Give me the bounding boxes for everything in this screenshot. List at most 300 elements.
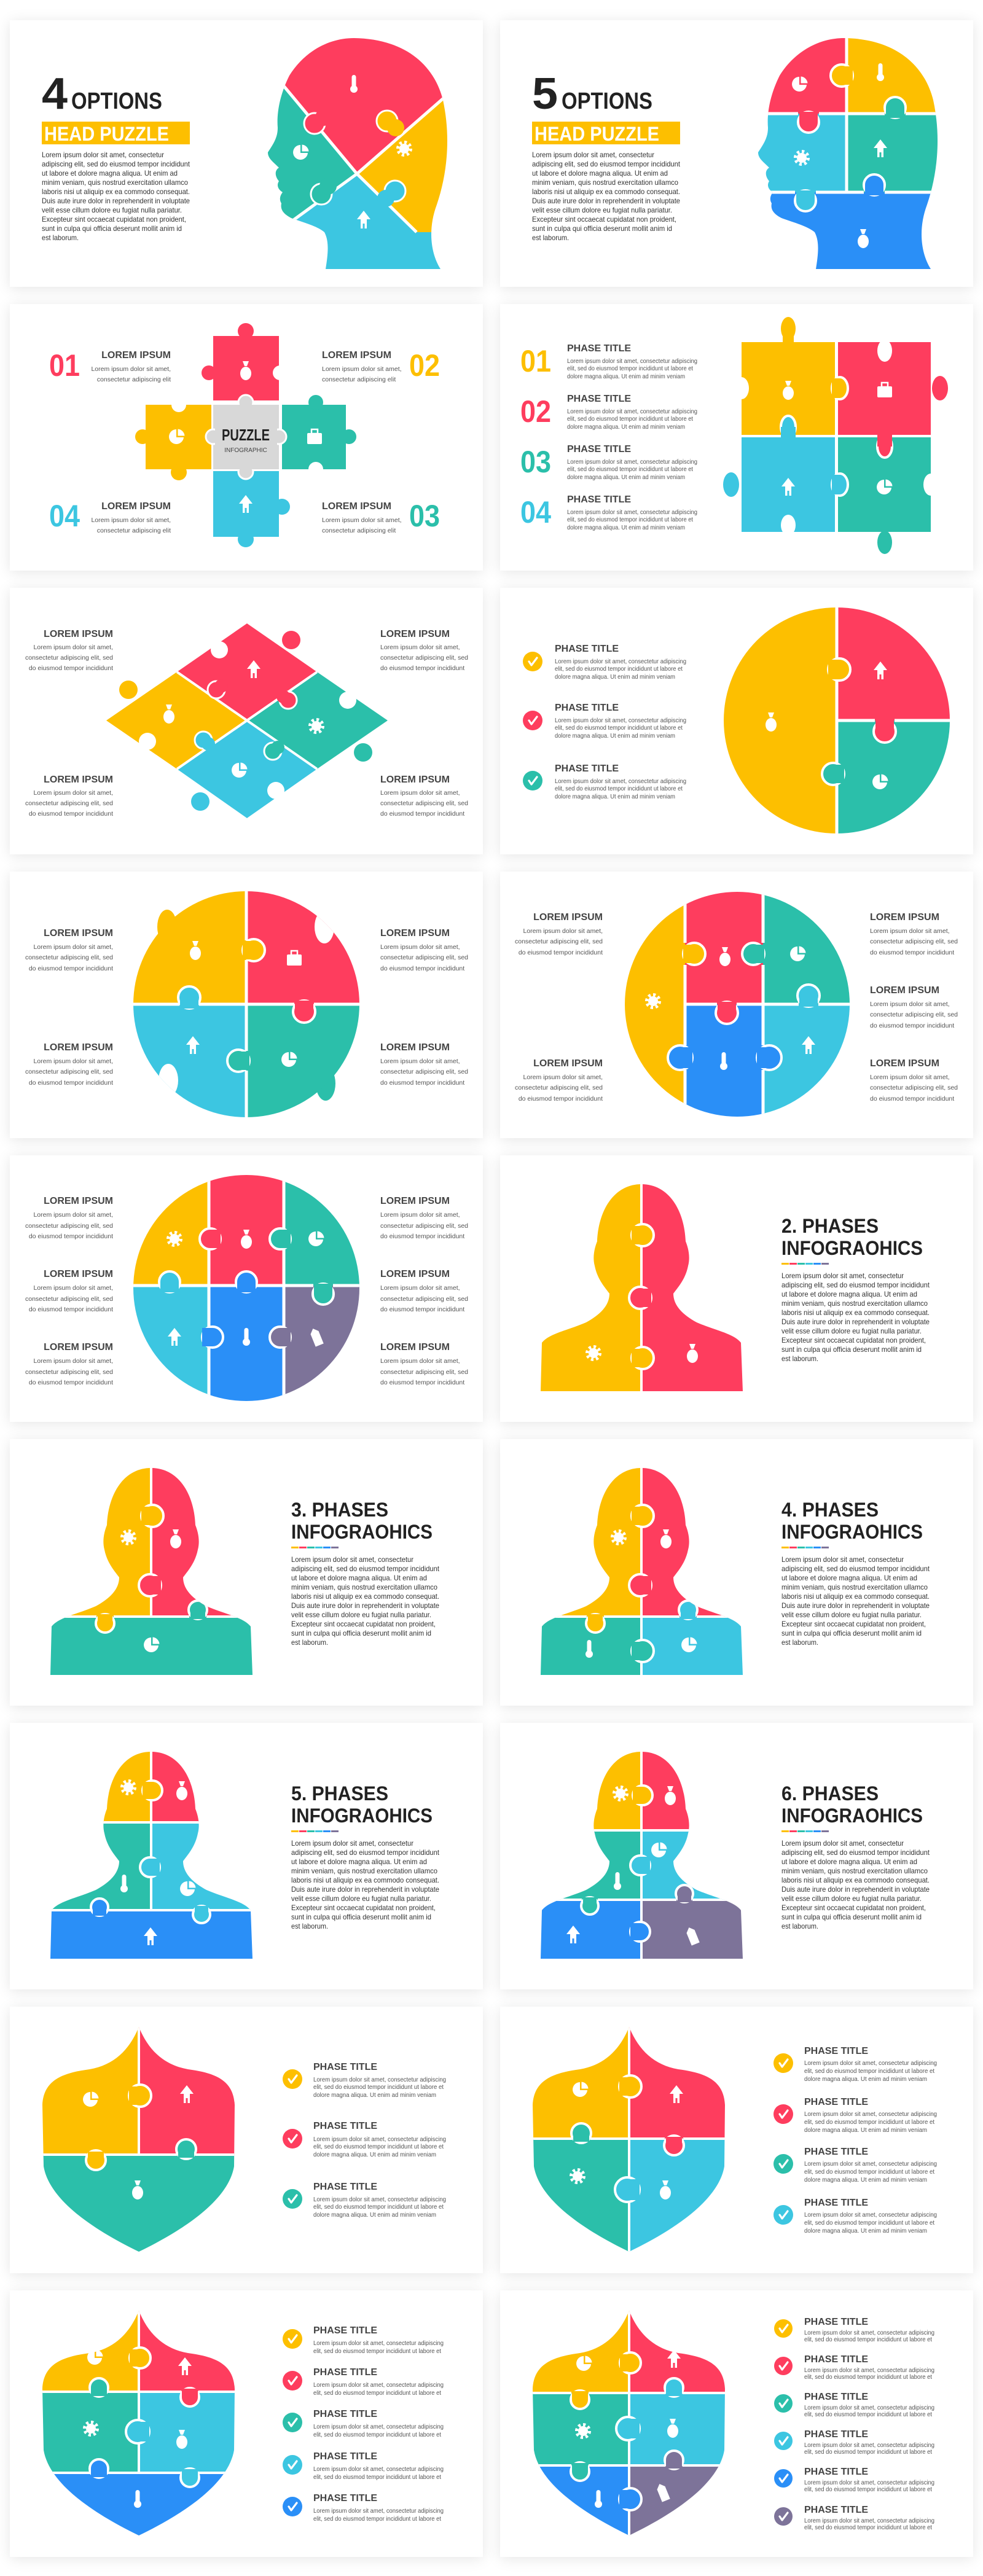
text: bottom left: do eiusmod tempor incididunt [29, 810, 113, 818]
phase list: PHASE TITLE [804, 2354, 868, 2365]
color bar [291, 1830, 339, 1832]
paragraph: velit esse cillum dolore eu fugiat nulla pariatur. [781, 1894, 922, 1903]
phase list [773, 2046, 937, 2234]
phase list: Lorem ipsum dolor sit amet, consectetur adipiscing [804, 2329, 934, 2336]
phase list [523, 644, 686, 800]
phase list: PHASE TITLE [804, 2429, 868, 2440]
phase list: 04 [520, 495, 551, 529]
phase list: PHASE TITLE [804, 2198, 868, 2208]
center label: puzzle infographic [222, 426, 270, 454]
card 13: 5 phases person [10, 1723, 483, 1989]
paragraph: minim veniam, quis nostrud exercitation ullamco [291, 1583, 437, 1591]
card 1: 4 options head puzzle [10, 20, 483, 287]
text left bottom: LOREM IPSUM [44, 1042, 113, 1053]
text right 1 [870, 912, 958, 956]
text left top: consectetur adipiscing elit, sed [25, 954, 113, 961]
phase list: PHASE TITLE [555, 703, 619, 713]
card 7: circle 4 pieces [10, 872, 483, 1138]
text right bottom: consectetur adipiscing elit, sed [380, 1068, 468, 1075]
paragraph: adipiscing elit, sed do eiusmod tempor incididunt [781, 1848, 930, 1857]
text left bottom: Lorem ipsum dolor sit amet, [33, 1058, 113, 1065]
title: 3. phases infograohics: INFOGRAOHICS [291, 1521, 433, 1543]
phase list: Lorem ipsum dolor sit amet, consectetur adipiscing [555, 778, 686, 785]
paragraph: sunt in culpa qui officia deserunt mollit anim id [291, 1913, 431, 1921]
paragraph: sunt in culpa qui officia deserunt mollit anim id [781, 1629, 922, 1637]
paragraph: Duis aute irure dolor in reprehenderit in voluptate [781, 1885, 930, 1894]
paragraph [291, 1839, 440, 1930]
paragraph: ut labore et dolore magna aliqua. Ut enim ad [291, 1857, 427, 1866]
phase list: elit, sed do eiusmod tempor incididunt ut labore et [555, 665, 683, 673]
paragraph: Lorem ipsum dolor sit amet, consectetur [532, 150, 654, 159]
item 03: LOREM IPSUM [322, 501, 391, 512]
item 04: Lorem ipsum dolor sit amet, [91, 517, 171, 524]
item 02: LOREM IPSUM [322, 350, 391, 361]
paragraph: est laborum. [781, 1922, 818, 1930]
phase list: PHASE TITLE [804, 2317, 868, 2327]
paragraph: laboris nisi ut aliquip ex ea commodo consequat. [42, 187, 190, 196]
phase list: elit, sed do eiusmod tempor incididunt ut labore et [313, 2389, 441, 2397]
puzzle cross graphic [135, 323, 356, 547]
title: 4. phases infograohics: 4. PHASES [781, 1499, 879, 1521]
paragraph: laboris nisi ut aliquip ex ea commodo consequat. [781, 1876, 930, 1884]
title: 5 options: 5 [532, 69, 558, 119]
paragraph: Excepteur sint occaecat cupidatat non proident, [42, 215, 186, 224]
phase list: dolore magna aliqua. Ut enim ad minim veniam [555, 793, 675, 800]
paragraph: est laborum. [532, 233, 569, 242]
circle puzzle graphic [133, 1175, 359, 1401]
item 04: consectetur adipiscing elit [97, 527, 171, 534]
item 04: LOREM IPSUM [101, 501, 171, 512]
phase list: PHASE TITLE [313, 2062, 377, 2072]
phase list: Lorem ipsum dolor sit amet, consectetur adipiscing [313, 2507, 444, 2515]
paragraph: Lorem ipsum dolor sit amet, consectetur [42, 150, 164, 159]
paragraph: sunt in culpa qui officia deserunt mollit anim id [532, 224, 672, 233]
phase list: dolore magna aliqua. Ut enim ad minim veniam [567, 373, 685, 380]
text left 1 [25, 1196, 113, 1240]
paragraph: laboris nisi ut aliquip ex ea commodo consequat. [291, 1592, 439, 1601]
phase list: dolore magna aliqua. Ut enim ad minim veniam [804, 2176, 927, 2184]
title: 3. phases infograohics [291, 1499, 433, 1543]
phase list: PHASE TITLE [804, 2097, 868, 2107]
banner: head puzzle: HEAD PUZZLE [535, 123, 659, 145]
phase list: elit, sed do eiusmod tempor incididunt ut labore et [804, 2411, 932, 2418]
text left top [25, 928, 113, 972]
phase list: PHASE TITLE [313, 2121, 377, 2131]
phase list: PHASE TITLE [804, 2392, 868, 2402]
item 02: consectetur adipiscing elit [322, 376, 396, 383]
title: 5 options [532, 69, 652, 119]
item 04: 04 [49, 499, 80, 533]
paragraph: adipiscing elit, sed do eiusmod tempor incididunt [781, 1564, 930, 1573]
paragraph: minim veniam, quis nostrud exercitation ullamco [781, 1867, 928, 1875]
text right 1: LOREM IPSUM [870, 912, 939, 923]
phase list: elit, sed do eiusmod tempor incididunt ut labore et [555, 724, 683, 732]
circle puzzle graphic [133, 891, 359, 1117]
text left 3: Lorem ipsum dolor sit amet, [33, 1357, 113, 1365]
phase list: dolore magna aliqua. Ut enim ad minim veniam [555, 732, 675, 740]
paragraph: ut labore et dolore magna aliqua. Ut enim ad [532, 169, 668, 178]
paragraph: velit esse cillum dolore eu fugiat nulla pariatur. [42, 206, 182, 214]
text left 3: LOREM IPSUM [44, 1342, 113, 1352]
phase list: Lorem ipsum dolor sit amet, consectetur adipiscing [313, 2340, 444, 2347]
paragraph: velit esse cillum dolore eu fugiat nulla pariatur. [781, 1327, 922, 1335]
text right 3 [870, 1058, 958, 1103]
text right 3: consectetur adipiscing elit, sed [870, 1084, 958, 1091]
phase list: PHASE TITLE [567, 394, 631, 404]
text: bottom right [380, 775, 468, 818]
paragraph: adipiscing elit, sed do eiusmod tempor incididunt [291, 1564, 440, 1573]
text left 1: do eiusmod tempor incididunt [29, 1233, 113, 1240]
text left 2: LOREM IPSUM [44, 1269, 113, 1279]
paragraph: velit esse cillum dolore eu fugiat nulla pariatur. [291, 1894, 431, 1903]
text: bottom right: LOREM IPSUM [380, 775, 450, 785]
paragraph: Excepteur sint occaecat cupidatat non proident, [532, 215, 676, 224]
title: 2. phases infograohics [781, 1215, 923, 1259]
phase list: Lorem ipsum dolor sit amet, consectetur adipiscing [804, 2404, 934, 2411]
phase list: elit, sed do eiusmod tempor incididunt ut labore et [804, 2486, 932, 2493]
shield puzzle graphic [525, 2303, 734, 2545]
title: 5. phases infograohics [291, 1782, 433, 1827]
text right 2: do eiusmod tempor incididunt [870, 1022, 954, 1029]
text left bottom [515, 1058, 603, 1103]
card 6: half circle puzzle with checklist [500, 588, 973, 854]
text: top left: LOREM IPSUM [44, 629, 113, 639]
text: bottom left: LOREM IPSUM [44, 775, 113, 785]
person puzzle graphic [537, 1464, 746, 1679]
phase list: elit, sed do eiusmod tempor incididunt ut labore et [313, 2431, 441, 2438]
item 03: 03 [409, 499, 440, 533]
text: bottom right: do eiusmod tempor incididunt [380, 810, 464, 818]
phase list: elit, sed do eiusmod tempor incididunt ut labore et [804, 2448, 932, 2456]
paragraph: laboris nisi ut aliquip ex ea commodo consequat. [532, 187, 680, 196]
text right top: Lorem ipsum dolor sit amet, [380, 943, 460, 951]
text: top left: Lorem ipsum dolor sit amet, [33, 644, 113, 651]
phase list [283, 2062, 446, 2219]
phase list: Lorem ipsum dolor sit amet, consectetur adipiscing [555, 717, 686, 724]
paragraph: Excepteur sint occaecat cupidatat non proident, [291, 1903, 436, 1912]
paragraph [781, 1271, 930, 1363]
text left top: LOREM IPSUM [533, 912, 603, 923]
phase list [283, 2325, 444, 2523]
shield puzzle graphic [34, 2303, 243, 2547]
item 01: 01 [49, 348, 80, 383]
item 01: Lorem ipsum dolor sit amet, [91, 365, 171, 373]
phase list: PHASE TITLE [313, 2325, 377, 2336]
phase list: PHASE TITLE [804, 2147, 868, 2157]
circle puzzle graphic [625, 892, 850, 1117]
text right 2: consectetur adipiscing elit, sed [870, 1011, 958, 1018]
text right 3: do eiusmod tempor incididunt [380, 1379, 464, 1386]
text left bottom: Lorem ipsum dolor sit amet, [523, 1074, 603, 1081]
paragraph: Lorem ipsum dolor sit amet, consectetur [781, 1839, 904, 1848]
paragraph: Duis aute irure dolor in reprehenderit in voluptate [532, 197, 680, 205]
text: top right [380, 629, 468, 672]
paragraph: Duis aute irure dolor in reprehenderit in voluptate [781, 1317, 930, 1326]
paragraph [291, 1555, 440, 1647]
text right 3: do eiusmod tempor incididunt [870, 1095, 954, 1103]
text right top [380, 928, 468, 972]
paragraph [42, 150, 190, 242]
phase list: dolore magna aliqua. Ut enim ad minim veniam [313, 2091, 436, 2099]
item 02: Lorem ipsum dolor sit amet, [322, 365, 402, 373]
text right 2: consectetur adipiscing elit, sed [380, 1295, 468, 1303]
paragraph: adipiscing elit, sed do eiusmod tempor incididunt [532, 160, 681, 168]
card 11: 3 phases person [10, 1439, 483, 1706]
text left 2: consectetur adipiscing elit, sed [25, 1295, 113, 1303]
title: 6. phases infograohics: 6. PHASES [781, 1782, 879, 1805]
item 03 [322, 499, 440, 534]
text right 3: Lorem ipsum dolor sit amet, [870, 1074, 950, 1081]
phase list: Lorem ipsum dolor sit amet, consectetur adipiscing [555, 658, 686, 665]
text left 3: do eiusmod tempor incididunt [29, 1379, 113, 1386]
paragraph: ut labore et dolore magna aliqua. Ut enim ad [42, 169, 178, 178]
item 02: 02 [409, 348, 440, 383]
color bar [781, 1547, 829, 1548]
text right 3: Lorem ipsum dolor sit amet, [380, 1357, 460, 1365]
card 15: shield 3 pieces [10, 2007, 483, 2273]
phase list: 03 [520, 445, 551, 479]
card 8: circle 5 pieces [500, 872, 973, 1138]
card 16: shield 4 pieces [500, 2007, 973, 2273]
paragraph: Lorem ipsum dolor sit amet, consectetur [291, 1555, 413, 1564]
circle puzzle graphic [721, 600, 955, 840]
paragraph: Lorem ipsum dolor sit amet, consectetur [781, 1271, 904, 1280]
person puzzle graphic [537, 1180, 746, 1395]
phase list: PHASE TITLE [567, 444, 631, 455]
paragraph: Excepteur sint occaecat cupidatat non proident, [781, 1336, 926, 1345]
paragraph [532, 150, 681, 242]
text right 2: Lorem ipsum dolor sit amet, [870, 1001, 950, 1008]
text right 1: do eiusmod tempor incididunt [380, 1233, 464, 1240]
paragraph: minim veniam, quis nostrud exercitation ullamco [291, 1867, 437, 1875]
phase list [774, 2317, 934, 2531]
person puzzle graphic [47, 1464, 256, 1678]
phase list: Lorem ipsum dolor sit amet, consectetur adipiscing [567, 408, 697, 415]
item 01 [49, 348, 171, 383]
title: 4 options: OPTIONS [71, 88, 162, 114]
2x2 puzzle graphic [723, 317, 948, 554]
paragraph: est laborum. [781, 1354, 818, 1363]
title: 6. phases infograohics [781, 1782, 923, 1827]
paragraph: minim veniam, quis nostrud exercitation ullamco [781, 1299, 928, 1308]
paragraph: est laborum. [291, 1638, 328, 1647]
text left 3 [25, 1342, 113, 1386]
text right bottom: do eiusmod tempor incididunt [380, 1079, 464, 1087]
phase list: elit, sed do eiusmod tempor incididunt ut labore et [804, 2219, 934, 2227]
phase list: Lorem ipsum dolor sit amet, consectetur adipiscing [567, 458, 697, 466]
phase list: Lorem ipsum dolor sit amet, consectetur adipiscing [313, 2423, 444, 2430]
phase list: dolore magna aliqua. Ut enim ad minim veniam [804, 2227, 927, 2234]
phase list: PHASE TITLE [567, 494, 631, 505]
phase list: dolore magna aliqua. Ut enim ad minim veniam [567, 423, 685, 431]
phase list: elit, sed do eiusmod tempor incididunt ut labore et [804, 2524, 932, 2531]
center label: puzzle infographic: INFOGRAPHIC [224, 447, 267, 454]
person puzzle graphic [47, 1747, 256, 1962]
text left 2: Lorem ipsum dolor sit amet, [33, 1284, 113, 1292]
text left top [515, 912, 603, 956]
phase list: dolore magna aliqua. Ut enim ad minim veniam [555, 673, 675, 681]
phase list: elit, sed do eiusmod tempor incididunt ut labore et [313, 2348, 441, 2355]
phase list: Lorem ipsum dolor sit amet, consectetur adipiscing [804, 2160, 937, 2168]
phase list: dolore magna aliqua. Ut enim ad minim veniam [313, 2151, 436, 2158]
paragraph: velit esse cillum dolore eu fugiat nulla pariatur. [532, 206, 672, 214]
paragraph: laboris nisi ut aliquip ex ea commodo consequat. [781, 1308, 930, 1317]
text right bottom [380, 1042, 468, 1087]
phase list: Lorem ipsum dolor sit amet, consectetur adipiscing [804, 2367, 934, 2374]
paragraph: Duis aute irure dolor in reprehenderit in voluptate [42, 197, 190, 205]
phase list: Lorem ipsum dolor sit amet, consectetur adipiscing [313, 2196, 446, 2203]
text right 2: LOREM IPSUM [870, 985, 939, 996]
title: 4. phases infograohics: INFOGRAOHICS [781, 1521, 923, 1543]
text left top: LOREM IPSUM [44, 928, 113, 939]
phase list: elit, sed do eiusmod tempor incididunt ut labore et [567, 466, 693, 473]
text: top right: do eiusmod tempor incididunt [380, 665, 464, 672]
diamond puzzle graphic [106, 623, 388, 818]
title: 4 options: 4 [42, 69, 68, 119]
item 02 [322, 348, 440, 383]
phase list: 01 [520, 344, 551, 378]
phase list: PHASE TITLE [313, 2451, 377, 2462]
phase list: dolore magna aliqua. Ut enim ad minim veniam [804, 2126, 927, 2134]
phase list: elit, sed do eiusmod tempor incididunt ut labore et [567, 415, 693, 423]
paragraph: minim veniam, quis nostrud exercitation ullamco [42, 178, 188, 187]
phase list: Lorem ipsum dolor sit amet, consectetur adipiscing [804, 2059, 937, 2067]
phase list: elit, sed do eiusmod tempor incididunt ut labore et [804, 2168, 934, 2176]
phase list: elit, sed do eiusmod tempor incididunt ut labore et [804, 2067, 934, 2075]
phase list: PHASE TITLE [804, 2467, 868, 2477]
text: bottom left [25, 775, 113, 818]
text right 2: LOREM IPSUM [380, 1269, 450, 1279]
phase list: dolore magna aliqua. Ut enim ad minim veniam [804, 2075, 927, 2083]
card 9: circle 6 pieces [10, 1155, 483, 1422]
paragraph: velit esse cillum dolore eu fugiat nulla pariatur. [781, 1610, 922, 1619]
phase list: PHASE TITLE [313, 2493, 377, 2504]
title: 5. phases infograohics: 5. PHASES [291, 1782, 388, 1805]
text right 2: Lorem ipsum dolor sit amet, [380, 1284, 460, 1292]
paragraph: laboris nisi ut aliquip ex ea commodo consequat. [291, 1876, 439, 1884]
paragraph: adipiscing elit, sed do eiusmod tempor incididunt [42, 160, 190, 168]
text right top: LOREM IPSUM [380, 928, 450, 939]
phase list: PHASE TITLE [313, 2182, 377, 2192]
center label: puzzle infographic: PUZZLE [222, 426, 270, 444]
paragraph: Lorem ipsum dolor sit amet, consectetur [291, 1839, 413, 1848]
phase list: Lorem ipsum dolor sit amet, consectetur adipiscing [804, 2110, 937, 2118]
title: 4 options [42, 69, 162, 119]
text right 1: consectetur adipiscing elit, sed [380, 1222, 468, 1230]
text right 1: LOREM IPSUM [380, 1196, 450, 1206]
phase list: elit, sed do eiusmod tempor incididunt ut labore et [313, 2143, 444, 2150]
phase list: Lorem ipsum dolor sit amet, consectetur adipiscing [567, 357, 697, 365]
text right 3: consectetur adipiscing elit, sed [380, 1368, 468, 1376]
text right 2 [380, 1269, 468, 1313]
text left top: do eiusmod tempor incididunt [29, 965, 113, 972]
paragraph: est laborum. [42, 233, 79, 242]
paragraph [781, 1839, 930, 1930]
phase list: PHASE TITLE [804, 2505, 868, 2515]
paragraph: Duis aute irure dolor in reprehenderit in voluptate [781, 1601, 930, 1610]
text right 1: Lorem ipsum dolor sit amet, [870, 927, 950, 935]
text left top: consectetur adipiscing elit, sed [515, 938, 603, 945]
phase list: Lorem ipsum dolor sit amet, consectetur adipiscing [804, 2479, 934, 2486]
paragraph: Excepteur sint occaecat cupidatat non proident, [781, 1620, 926, 1628]
text: top left [25, 629, 113, 672]
text: bottom left: Lorem ipsum dolor sit amet, [33, 789, 113, 797]
card 4: square puzzle with phases [500, 304, 973, 571]
phase list: Lorem ipsum dolor sit amet, consectetur adipiscing [313, 2381, 444, 2389]
phase list: elit, sed do eiusmod tempor incididunt ut labore et [313, 2515, 441, 2523]
text left 1: consectetur adipiscing elit, sed [25, 1222, 113, 1230]
paragraph: est laborum. [781, 1638, 818, 1647]
item 01: LOREM IPSUM [101, 350, 171, 361]
title: 6. phases infograohics: INFOGRAOHICS [781, 1805, 923, 1827]
text left top: Lorem ipsum dolor sit amet, [523, 927, 603, 935]
text right 1: consectetur adipiscing elit, sed [870, 938, 958, 945]
paragraph: Excepteur sint occaecat cupidatat non proident, [781, 1903, 926, 1912]
text left bottom [25, 1042, 113, 1087]
paragraph: sunt in culpa qui officia deserunt mollit anim id [781, 1345, 922, 1354]
phase list: elit, sed do eiusmod tempor incididunt ut labore et [804, 2336, 932, 2343]
color bar [781, 1830, 829, 1832]
phase list: PHASE TITLE [313, 2367, 377, 2378]
paragraph: adipiscing elit, sed do eiusmod tempor incididunt [291, 1848, 440, 1857]
phase list: elit, sed do eiusmod tempor incididunt ut labore et [313, 2083, 444, 2091]
text left 2: do eiusmod tempor incididunt [29, 1306, 113, 1313]
banner: head puzzle: HEAD PUZZLE [44, 123, 169, 145]
phase list: elit, sed do eiusmod tempor incididunt ut labore et [313, 2473, 441, 2481]
text left top: do eiusmod tempor incididunt [519, 949, 603, 956]
phase list: elit, sed do eiusmod tempor incididunt ut labore et [804, 2118, 934, 2126]
text right 1: do eiusmod tempor incididunt [870, 949, 954, 956]
phase list: elit, sed do eiusmod tempor incididunt ut labore et [313, 2203, 444, 2211]
paragraph: Excepteur sint occaecat cupidatat non proident, [291, 1620, 436, 1628]
phase list: 02 [520, 394, 551, 429]
person puzzle graphic [537, 1747, 746, 1962]
head puzzle graphic [268, 38, 447, 269]
phase list: Lorem ipsum dolor sit amet, consectetur adipiscing [804, 2211, 937, 2219]
paragraph: velit esse cillum dolore eu fugiat nulla pariatur. [291, 1610, 431, 1619]
paragraph: Duis aute irure dolor in reprehenderit in voluptate [291, 1885, 439, 1894]
text left bottom: LOREM IPSUM [533, 1058, 603, 1069]
text: top right: Lorem ipsum dolor sit amet, [380, 644, 460, 651]
phase list: Lorem ipsum dolor sit amet, consectetur adipiscing [567, 509, 697, 516]
phase list: Lorem ipsum dolor sit amet, consectetur adipiscing [313, 2136, 446, 2143]
paragraph: Lorem ipsum dolor sit amet, consectetur [781, 1555, 904, 1564]
color bar [291, 1547, 339, 1548]
phase list: elit, sed do eiusmod tempor incididunt ut labore et [567, 516, 693, 523]
phase list: elit, sed do eiusmod tempor incididunt ut labore et [555, 785, 683, 792]
phase list: elit, sed do eiusmod tempor incididunt ut labore et [567, 365, 693, 372]
text left 1: Lorem ipsum dolor sit amet, [33, 1211, 113, 1219]
text left bottom: consectetur adipiscing elit, sed [515, 1084, 603, 1091]
phase list: Lorem ipsum dolor sit amet, consectetur adipiscing [804, 2517, 934, 2524]
paragraph: sunt in culpa qui officia deserunt mollit anim id [291, 1629, 431, 1637]
text right top: consectetur adipiscing elit, sed [380, 954, 468, 961]
text right 1: Lorem ipsum dolor sit amet, [380, 1211, 460, 1219]
item 03: consectetur adipiscing elit [322, 527, 396, 534]
card 3: puzzle cross 01-04 [10, 304, 483, 571]
text right 1 [380, 1196, 468, 1240]
card 18: shield 6 pieces [500, 2290, 973, 2557]
text left 2 [25, 1269, 113, 1313]
phase list: PHASE TITLE [804, 2046, 868, 2056]
title: 5 options: OPTIONS [562, 88, 652, 114]
shield puzzle graphic [533, 2027, 725, 2252]
phase list: Lorem ipsum dolor sit amet, consectetur adipiscing [804, 2441, 934, 2449]
text: bottom right: Lorem ipsum dolor sit amet, [380, 789, 460, 797]
paragraph [781, 1555, 930, 1647]
phase list: PHASE TITLE [555, 763, 619, 774]
card 14: 6 phases person [500, 1723, 973, 1989]
